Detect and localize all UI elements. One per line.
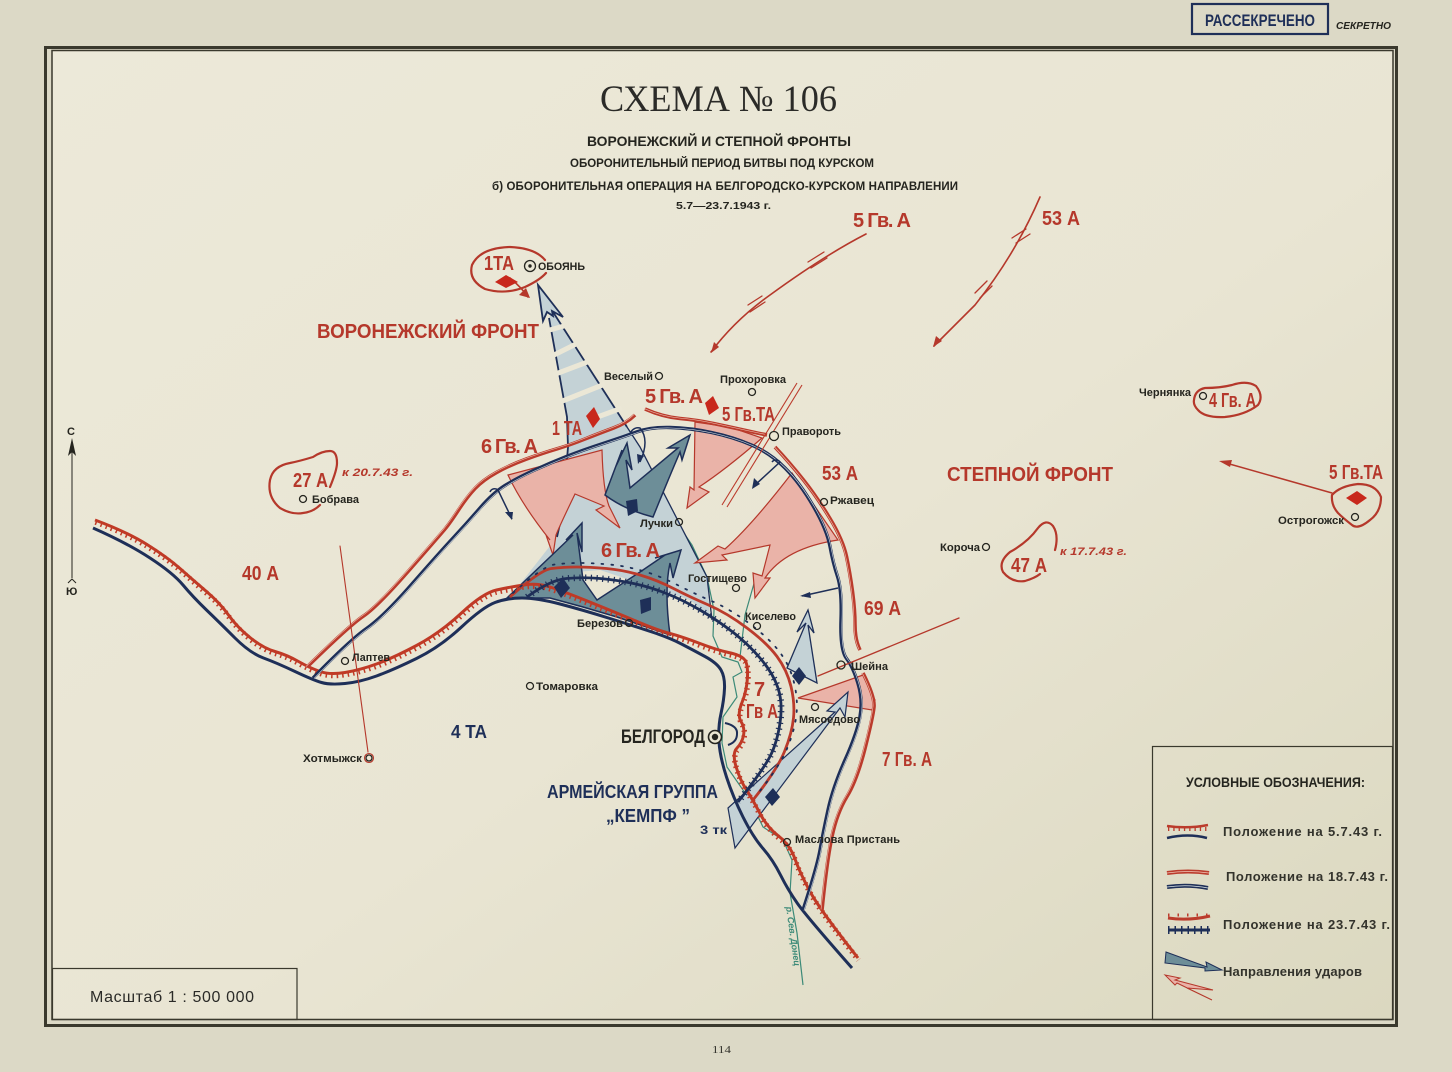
army group 5 Gv TA ring at Ostrogozhsk (1278, 462, 1383, 527)
settlements: Мясоедово (799, 714, 860, 726)
title: 5.7—23.7.1943 г. (676, 200, 771, 212)
pink strike: Sheina sector (798, 675, 875, 710)
army group 4 Gv A ring (1139, 383, 1261, 417)
red front and army labels: 5 Гв. А (645, 386, 703, 408)
scale box: Масштаб 1 : 500 000 (90, 989, 254, 1006)
title: ОБОРОНИТЕЛЬНЫЙ ПЕРИОД БИТВЫ ПОД КУРСКОМ (570, 157, 874, 170)
settlements: Веселый (604, 371, 653, 383)
title: б) ОБОРОНИТЕЛЬНАЯ ОПЕРАЦИЯ НА БЕЛГОРОДСКО-КУРСКОМ НАПРАВЛЕНИИ (492, 181, 958, 193)
army group 4 Gv A ring: Чернянка (1139, 387, 1192, 399)
dark strike wedge: Berezov (507, 523, 681, 635)
enemy force labels: 3 тк (700, 823, 728, 837)
dark strike wedge: Luchki (605, 435, 690, 517)
army group 27 A ring: Бобрава (312, 494, 360, 506)
legend: position 18.7.43: Положение на 18.7.43 г. (1226, 869, 1388, 884)
red front and army labels: 7 (754, 679, 765, 701)
settlements: Гостищево (688, 573, 747, 585)
light strike arrow: north of Myasoedovo (787, 610, 817, 683)
blue counter-arrows (490, 428, 838, 745)
army group 47 A ring (940, 522, 1127, 581)
Belgorod city: БЕЛГОРОД (621, 727, 705, 748)
secret stamp: СЕКРЕТНО (1336, 21, 1391, 32)
legend: position 5.7.43: Положение на 5.7.43 г. (1223, 824, 1382, 839)
army group 5 Gv TA ring at Ostrogozhsk: 5 Гв.ТА (1329, 462, 1383, 484)
secret stamp: РАССЕКРЕЧЕНО (1205, 11, 1315, 30)
red front and army labels: 5 Гв. А (853, 210, 911, 232)
army group 47 A ring: к 17.7.43 г. (1060, 546, 1127, 558)
settlements (303, 371, 900, 846)
settlements: Лаптев (352, 652, 390, 664)
settlements: Хотмыжск (303, 753, 363, 765)
red front and army labels: Гв А (746, 701, 778, 723)
army group 27 A ring (269, 451, 413, 513)
river Seversky Donets (677, 523, 803, 985)
red front and army labels: 5 Гв.ТА (722, 404, 775, 426)
army group 1 TA ring near Oboyan: 1ТА (484, 253, 514, 275)
red front and army labels (242, 208, 1113, 771)
settlements: Ржавец (830, 495, 874, 507)
red front and army labels: 53 А (1042, 208, 1080, 230)
red reserve movement arrows (340, 197, 1332, 752)
army group 1 TA ring near Oboyan: ОБОЯНЬ (538, 261, 585, 273)
settlements: Киселево (745, 611, 796, 623)
army group 47 A ring: Короча (940, 542, 981, 554)
red front and army labels: 1 ТА (552, 418, 582, 440)
Pravorot double road line (722, 383, 802, 507)
pink strike: Rzhavets sector (695, 473, 838, 598)
army group 47 A ring: 47 А (1011, 555, 1047, 577)
army group 5 Gv TA ring at Ostrogozhsk: Острогожск (1278, 515, 1345, 527)
tank formation diamonds (554, 396, 806, 806)
enemy force labels: АРМЕЙСКАЯ ГРУППА (547, 781, 718, 802)
red front and army labels: 7 Гв. А (882, 749, 932, 771)
front lines 23 July (510, 563, 797, 802)
settlements: Правороть (782, 426, 841, 438)
scale box (52, 968, 297, 1020)
red front and army labels: 69 А (864, 598, 901, 620)
north-south arrow: С (67, 426, 75, 438)
army group 4 Gv A ring: 4 Гв. А (1209, 390, 1256, 412)
red front and army labels: ВОРОНЕЖСКИЙ ФРОНТ (317, 319, 539, 343)
north-south arrow (66, 426, 77, 598)
legend: strike directions (1165, 952, 1362, 1000)
red front and army labels: 40 А (242, 563, 279, 585)
title: ВОРОНЕЖСКИЙ И СТЕПНОЙ ФРОНТЫ (587, 132, 851, 149)
legend: position 23.7.43: Положение на 23.7.43 г. (1223, 917, 1390, 932)
front lines 5 July (93, 520, 858, 968)
secret stamp (1192, 4, 1391, 34)
settlements: Прохоровка (720, 374, 787, 386)
enemy force labels: 4 ТА (451, 722, 487, 742)
light strike arrow: Korocha direction (728, 692, 848, 848)
army group 27 A ring: к 20.7.43 г. (342, 467, 413, 479)
page number: 114 (712, 1044, 732, 1056)
front lines 18 July (306, 408, 874, 910)
red front and army labels: 6 Гв. А (481, 436, 538, 458)
red front and army labels: СТЕПНОЙ ФРОНТ (947, 462, 1113, 486)
army group 27 A ring: 27 А (293, 470, 328, 492)
red front and army labels: 53 А (822, 463, 858, 485)
north-south arrow: Ю (66, 586, 77, 598)
settlements: Маслова Пристань (795, 834, 900, 846)
settlements: Лучки (640, 518, 673, 530)
red front and army labels: 6 Гв. А (601, 540, 660, 562)
enemy force labels: „КЕМПФ ” (606, 806, 690, 826)
settlements: Березов (577, 618, 623, 630)
pink strike: west sector (508, 450, 620, 555)
river Seversky Donets: р. Сев. Донец (784, 905, 802, 967)
legend: strike directions: Направления ударов (1223, 964, 1362, 979)
settlements: Шейна (851, 661, 889, 673)
legend: position 23.7.43 (1168, 915, 1390, 932)
pink strike: Prokhorovka sector (687, 422, 762, 508)
army group 1 TA ring near Oboyan (471, 247, 585, 292)
title (492, 79, 958, 212)
settlements: Томаровка (536, 681, 599, 693)
title: СХЕМА № 106 (600, 79, 837, 120)
legend title: УСЛОВНЫЕ ОБОЗНАЧЕНИЯ: (1186, 774, 1365, 790)
enemy force labels (451, 722, 728, 837)
legend panel (1152, 746, 1392, 1020)
light-blue strike zone towards Oboyan (510, 285, 712, 620)
